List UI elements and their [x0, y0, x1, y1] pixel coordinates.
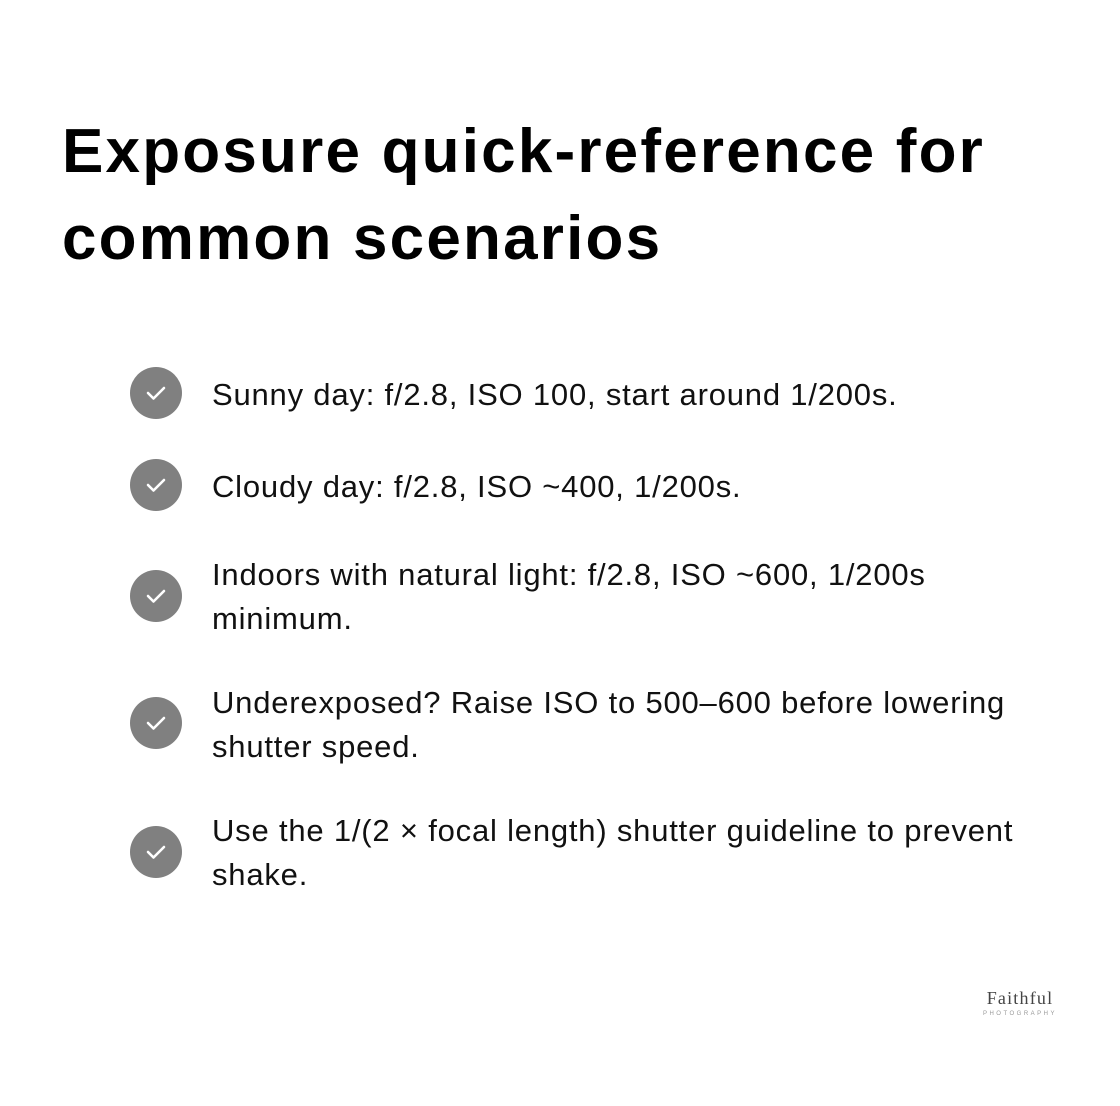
- text: minimum.: [212, 601, 353, 636]
- logo: Faithful: [987, 988, 1053, 1008]
- icon: check: [130, 459, 182, 511]
- text: Cloudy day: f/2.8, ISO ~400, 1/200s.: [212, 469, 741, 504]
- text: [212, 685, 1005, 764]
- text: Use the 1/(2 × focal length) shutter guideline to prevent: [212, 813, 1013, 848]
- text: shutter speed.: [212, 729, 420, 764]
- text: [212, 557, 926, 636]
- title: common scenarios: [62, 204, 662, 273]
- item: underexposed: [130, 685, 1005, 764]
- text: Indoors with natural light: f/2.8, ISO ~600, 1/200s: [212, 557, 926, 592]
- text: Underexposed? Raise ISO to 500–600 before lowering: [212, 685, 1005, 720]
- item: indoors: [130, 557, 926, 636]
- item: sunny day: [130, 367, 898, 419]
- icon: check: [130, 697, 182, 749]
- text: [212, 813, 1013, 892]
- title: [62, 117, 985, 273]
- item: focal length: [130, 813, 1013, 892]
- icon: check: [130, 367, 182, 419]
- logo: PHOTOGRAPHY: [983, 1011, 1057, 1017]
- icon: check: [130, 826, 182, 878]
- title: Exposure quick-reference for: [62, 117, 985, 186]
- text: Sunny day: f/2.8, ISO 100, start around 1/200s.: [212, 377, 898, 412]
- logo: [983, 988, 1057, 1017]
- icon: check: [130, 570, 182, 622]
- item: cloudy day: [130, 459, 741, 511]
- text: shake.: [212, 857, 308, 892]
